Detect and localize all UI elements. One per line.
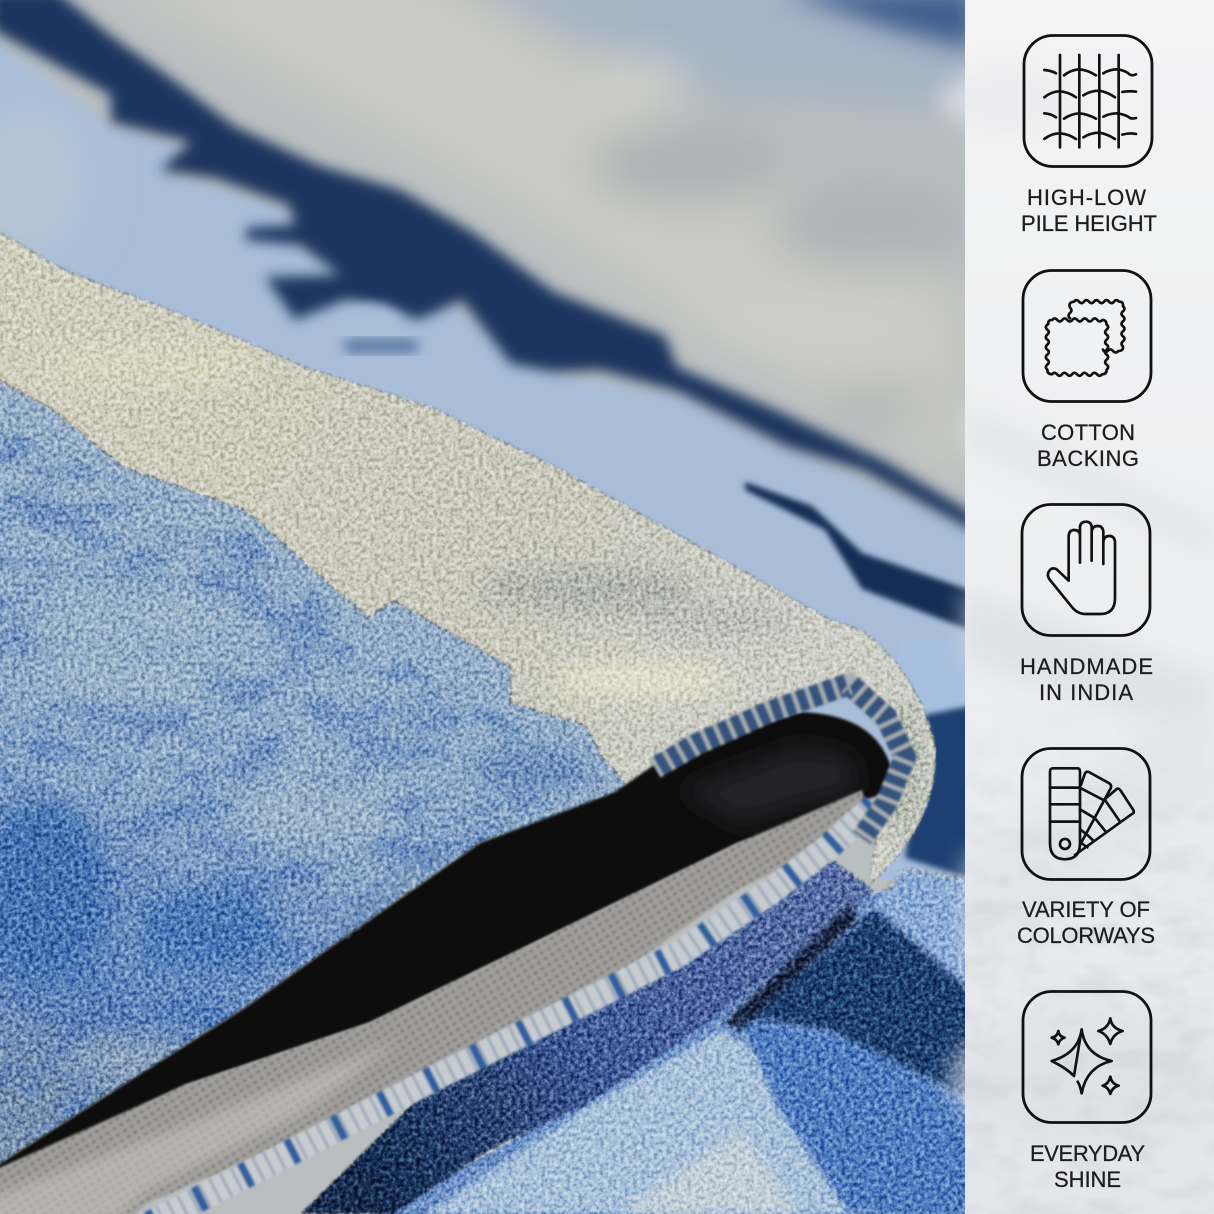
label: SHINE <box>1054 1167 1121 1192</box>
rolled rug top blue section <box>0 375 634 1170</box>
feature: handmade in india <box>1020 504 1153 705</box>
feature: cotton backing <box>1023 270 1151 471</box>
feature: high-low pile height <box>1021 36 1157 236</box>
faint dark bar <box>345 340 417 352</box>
label: HIGH-LOW <box>1027 185 1146 210</box>
rolled rug top cream section <box>0 226 936 884</box>
left grey-blue haze <box>0 120 73 239</box>
light blob in stripe <box>352 298 404 320</box>
label: BACKING <box>1037 446 1139 471</box>
icon: colour swatch fan <box>1022 748 1150 880</box>
label <box>1021 185 1157 236</box>
label: IN INDIA <box>1039 680 1133 705</box>
twisted binding upper <box>340 684 905 930</box>
label <box>1037 420 1139 471</box>
second navy stripe <box>745 482 975 632</box>
label: VARIETY OF <box>1022 897 1150 922</box>
top right navy blur <box>780 0 975 50</box>
icon: pile height weave <box>1024 36 1152 166</box>
grey cotton backing <box>0 790 868 1214</box>
label <box>1030 1141 1145 1192</box>
label <box>1020 654 1153 705</box>
label: HANDMADE <box>1020 654 1153 679</box>
mottled blue tufts <box>0 420 600 1170</box>
label: EVERYDAY <box>1030 1141 1145 1166</box>
dark hollow of the roll <box>0 712 895 1178</box>
panel: feature sidebar <box>940 0 1214 1214</box>
navy stripe <box>0 0 975 532</box>
inner back wall shade <box>680 745 860 825</box>
twisted binding lower <box>150 806 874 1214</box>
backing light lower band <box>0 1040 400 1214</box>
label: COLORWAYS <box>1017 923 1155 948</box>
light blue field <box>0 30 980 800</box>
feature: variety of colorways <box>1017 748 1155 948</box>
label <box>1017 897 1155 948</box>
icon: sparkles <box>1023 992 1151 1122</box>
sidebar mottling <box>965 810 1214 1214</box>
foreground rug bottom right <box>300 850 975 1214</box>
feature: everyday shine <box>1023 992 1151 1192</box>
right-side rug under the fold <box>880 756 964 880</box>
icon: hand <box>1022 504 1150 636</box>
label: PILE HEIGHT <box>1021 211 1157 236</box>
label: COTTON <box>1041 420 1135 445</box>
icon: fabric swatches <box>1023 270 1151 402</box>
